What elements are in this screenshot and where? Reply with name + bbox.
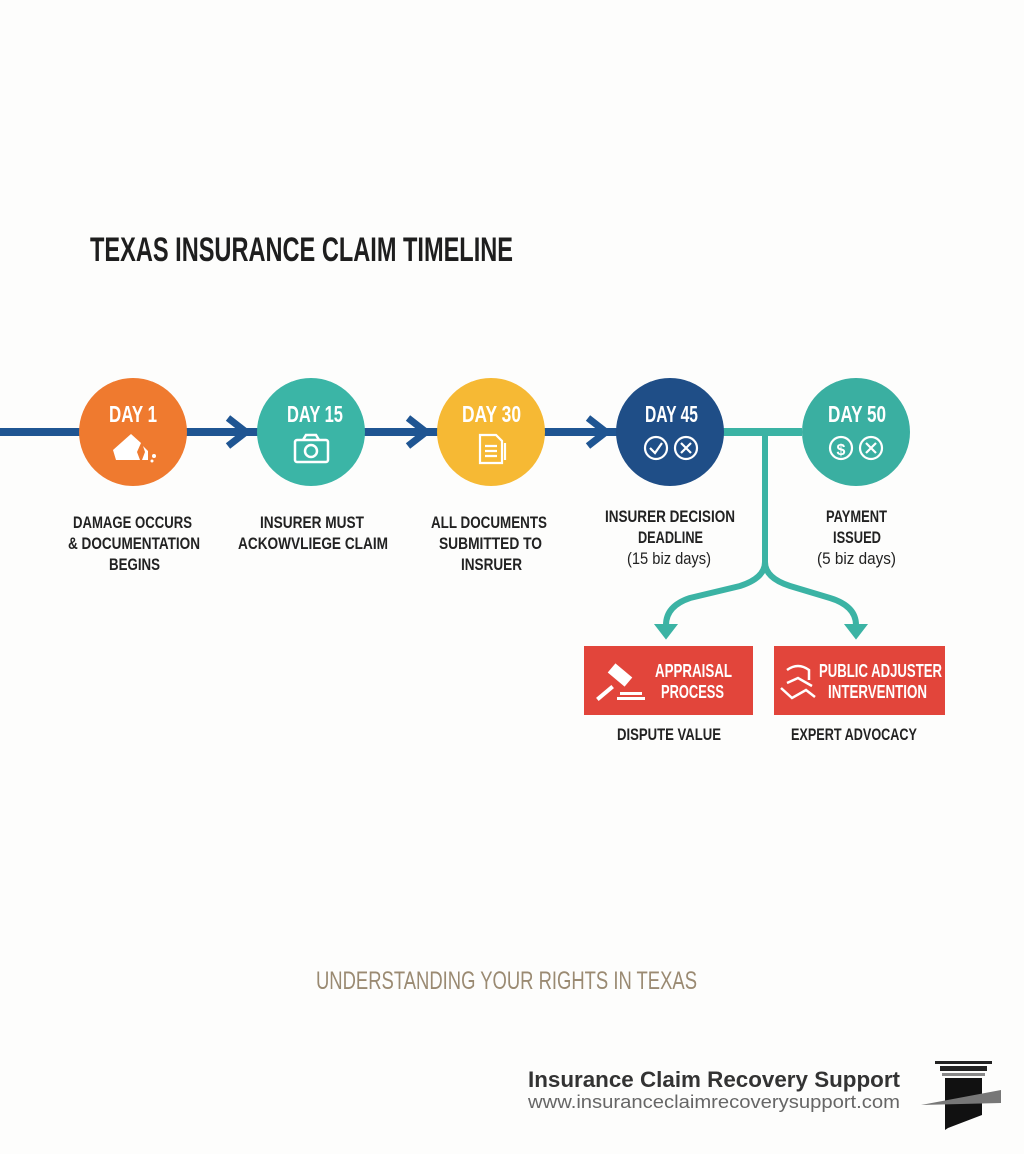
label: day 50 bbox=[817, 507, 896, 568]
label: day 50: PAYMENT bbox=[826, 507, 887, 526]
icon: document bbox=[480, 435, 505, 463]
step: day 50: $ bbox=[837, 442, 846, 459]
label: dispute value: DISPUTE VALUE bbox=[617, 725, 721, 744]
label: day 15: INSURER MUST bbox=[260, 513, 364, 532]
box: public adjuster: PUBLIC ADJUSTER bbox=[819, 661, 942, 681]
arrow 1 bbox=[228, 418, 246, 446]
label: day 1: DAMAGE OCCURS bbox=[73, 513, 192, 532]
step: day 1 bbox=[68, 378, 200, 574]
label: day 50: ISSUED bbox=[833, 528, 881, 547]
step: day 30: DAY 30 bbox=[462, 401, 521, 427]
box: public adjuster: INTERVENTION bbox=[828, 682, 927, 702]
branch arrows bbox=[656, 432, 866, 638]
footer brand bbox=[527, 1067, 901, 1112]
step: day 50: DAY 50 bbox=[828, 401, 886, 427]
icon: camera bbox=[295, 435, 328, 462]
box: appraisal process: APPRAISAL bbox=[655, 661, 732, 681]
label: day 45: DEADLINE bbox=[638, 528, 703, 547]
step: day 1: DAY 1 bbox=[109, 401, 157, 427]
timeline line bbox=[0, 428, 802, 436]
label: day 1: BEGINS bbox=[109, 555, 160, 574]
subtitle: UNDERSTANDING YOUR RIGHTS IN TEXAS bbox=[316, 967, 697, 995]
label: day 50: (5 biz days) bbox=[817, 549, 896, 568]
step: day 45 bbox=[605, 378, 735, 568]
label: day 45: INSURER DECISION bbox=[605, 507, 735, 526]
icon: gavel bbox=[596, 663, 645, 701]
label: day 1: & DOCUMENTATION bbox=[68, 534, 200, 553]
box: appraisal process: PROCESS bbox=[661, 682, 724, 702]
icon: payment / deny bbox=[830, 437, 882, 459]
arrow 3 bbox=[588, 418, 606, 446]
label: day 45: (15 biz days) bbox=[627, 549, 711, 568]
step: day 15: DAY 15 bbox=[287, 401, 343, 427]
label: day 30: SUBMITTED TO bbox=[439, 534, 542, 553]
label: day 1 bbox=[68, 513, 200, 574]
step: day 50 bbox=[802, 378, 910, 568]
label: day 30 bbox=[431, 513, 547, 574]
footer brand: www.insuranceclaimrecoverysupport.com bbox=[527, 1092, 900, 1112]
icon: shield handshake bbox=[781, 666, 815, 698]
label: day 30: ALL DOCUMENTS bbox=[431, 513, 547, 532]
label: day 15: ACKOWVLIEGE CLAIM bbox=[238, 534, 388, 553]
arrow 2 bbox=[408, 418, 426, 446]
title: TEXAS INSURANCE CLAIM TIMELINE bbox=[90, 231, 513, 269]
label: expert advocacy: EXPERT ADVOCACY bbox=[791, 725, 917, 744]
step: day 45: DAY 45 bbox=[645, 401, 698, 427]
label: day 15 bbox=[238, 513, 388, 553]
box: appraisal process bbox=[584, 646, 753, 744]
label: day 30: INSRUER bbox=[461, 555, 522, 574]
footer brand: Insurance Claim Recovery Support bbox=[528, 1067, 901, 1092]
icon: approve / deny bbox=[645, 437, 697, 459]
step: day 30 bbox=[431, 378, 547, 574]
label: day 45 bbox=[605, 507, 735, 568]
logo: pillar bbox=[921, 1061, 1001, 1130]
step: day 15 bbox=[238, 378, 388, 553]
box: public adjuster bbox=[774, 646, 945, 744]
icon: broken house bbox=[113, 434, 156, 462]
